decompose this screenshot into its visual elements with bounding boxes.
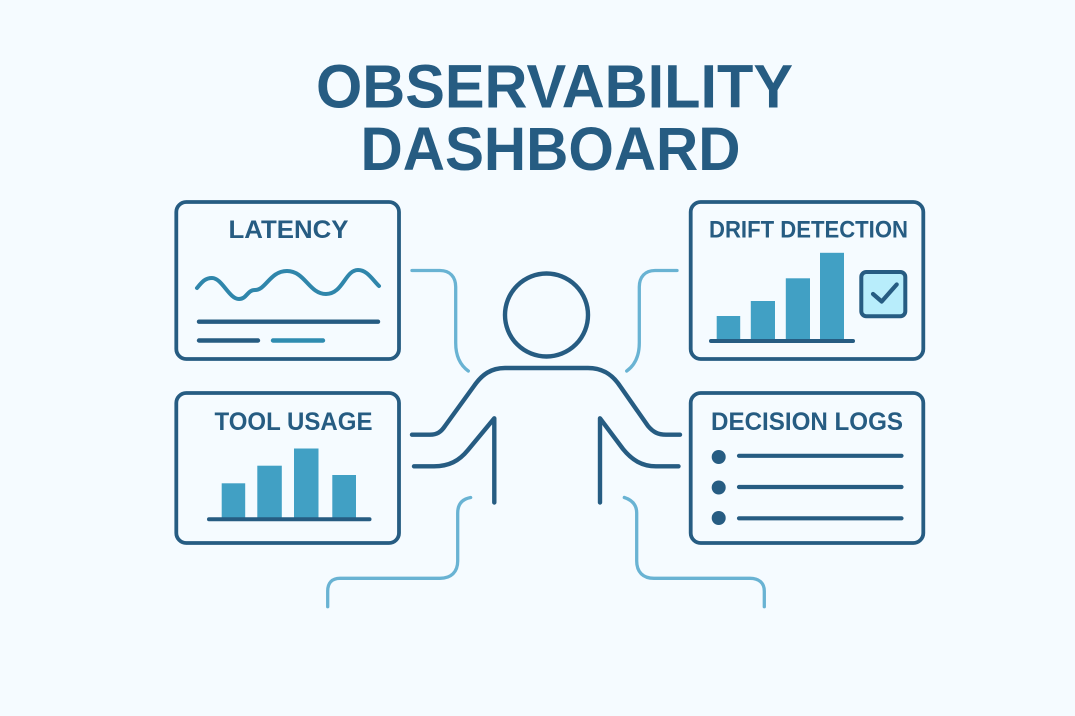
heading: drift detection: DRIFT DETECTION <box>709 216 908 244</box>
heading: decision logs: DECISION LOGS <box>711 408 903 436</box>
connectors <box>328 270 764 607</box>
title <box>316 52 793 183</box>
panel: drift detection <box>691 202 923 359</box>
line chart: latency <box>197 270 379 299</box>
icon: checkbox <box>861 272 905 316</box>
bar chart: tool usage <box>209 448 370 519</box>
panel: latency <box>176 202 399 359</box>
title: DASHBOARD <box>360 115 740 183</box>
bar chart: drift <box>711 253 853 341</box>
heading: tool usage: TOOL USAGE <box>214 408 372 436</box>
title: OBSERVABILITY <box>316 52 793 120</box>
text placeholder lines <box>199 322 378 340</box>
panel: tool usage <box>176 393 399 543</box>
heading: latency: LATENCY <box>228 216 349 244</box>
figure: person outline <box>412 274 680 502</box>
panel: decision logs <box>691 393 923 543</box>
bulleted list <box>712 450 902 525</box>
